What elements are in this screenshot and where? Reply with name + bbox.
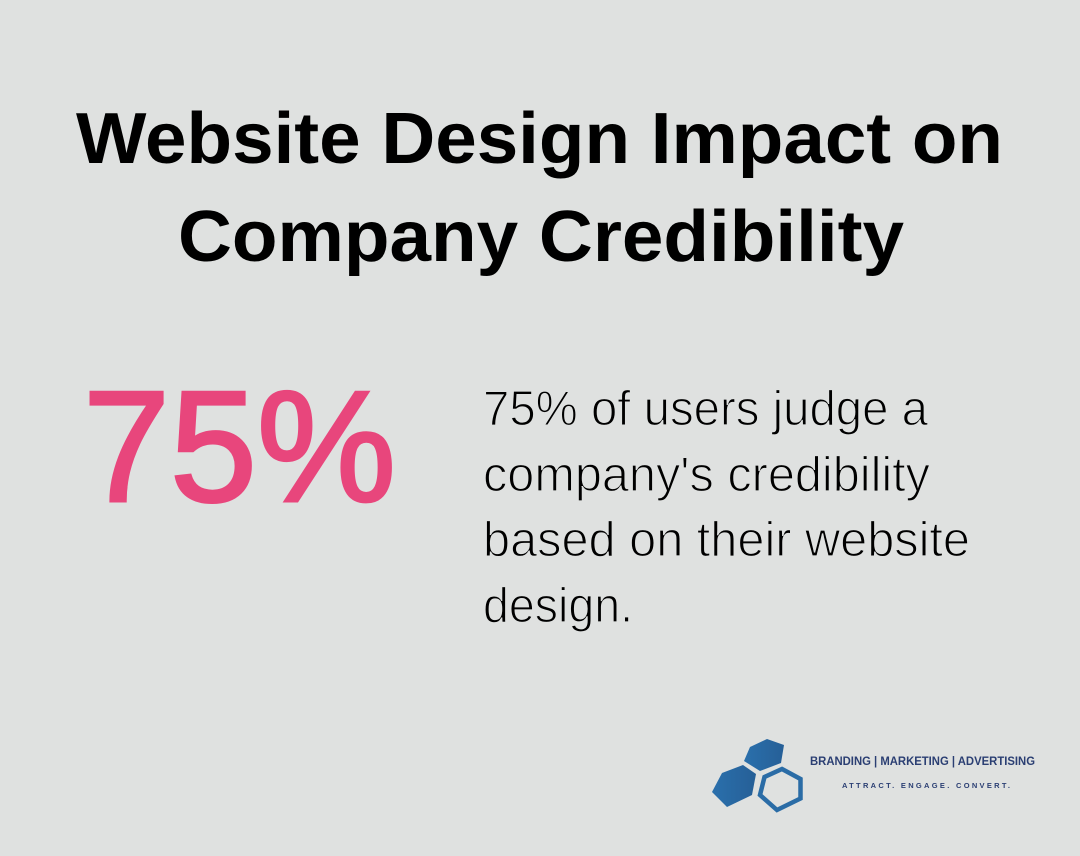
logo (712, 739, 1035, 810)
description text (483, 382, 970, 633)
logo tagline: services: BRANDING | MARKETING | ADVERTISING (810, 756, 1035, 768)
logo tagline: slogan: ATTRACT. ENGAGE. CONVERT. (842, 781, 1010, 790)
big statistic: 75%: 75% (83, 359, 396, 535)
icon: hexagon logo mark (712, 739, 800, 810)
title: Company Credibility (178, 197, 904, 277)
description text: design. (483, 579, 633, 633)
title: Website Design Impact on (76, 99, 1003, 179)
title (76, 99, 1003, 277)
description text: 75% of users judge a (483, 382, 929, 436)
description text: based on their website (483, 513, 970, 567)
description text: company's credibility (483, 448, 930, 502)
